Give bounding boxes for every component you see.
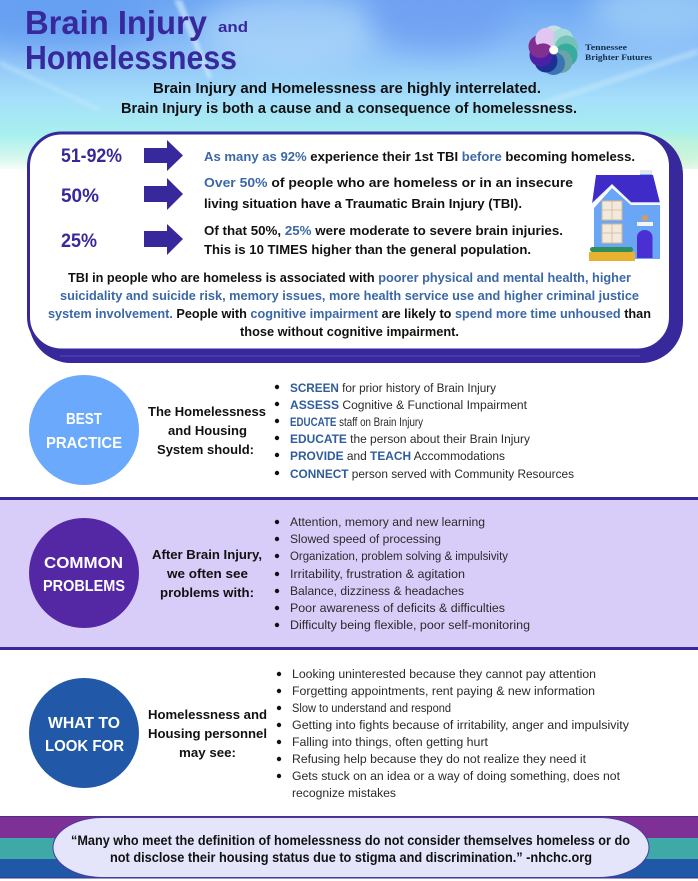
list: best practice actions <box>275 381 574 481</box>
list: best practice actions: CONNECT person served with Community Resources <box>290 467 574 481</box>
stat: 50%: Over 50% of people who are homeless or in an insecure <box>204 175 573 190</box>
stat: 25% <box>61 223 563 257</box>
list: best practice actions: ASSESS Cognitive & Functional Impairment <box>290 398 528 412</box>
panel: statistics card <box>28 133 683 363</box>
heading: after brain injury: problems with: <box>160 585 254 600</box>
text block: TBI paragraph: those without cognitive impairment. <box>240 324 459 339</box>
circle: best practice: PRACTICE <box>46 435 122 452</box>
card shadow highlight line <box>60 355 640 357</box>
list: what to look for: Refusing help because they do not realize they need it <box>292 752 587 766</box>
heading: homelessness and housing personnel: may see: <box>179 745 236 760</box>
stat: 51-92%: As many as 92% experience their 1st TBI before becoming homeless. <box>204 149 635 164</box>
heading: homelessness and housing personnel <box>148 707 267 760</box>
panel: common problems <box>0 497 698 650</box>
circle: best practice: BEST <box>66 411 102 428</box>
heading: the homelessness and housing system should: System should: <box>157 442 254 457</box>
callout: quote pill <box>53 818 649 878</box>
heading: homelessness and housing personnel: Homelessness and <box>148 707 267 722</box>
subtitle <box>121 81 577 117</box>
circle: common problems <box>29 518 139 628</box>
list: best practice actions: EDUCATE staff on Brain Injury <box>290 415 424 429</box>
list: common problems: Difficulty being flexible, poor self-monitoring <box>290 618 530 632</box>
heading: the homelessness and housing system should: and Housing <box>168 423 247 438</box>
text block: TBI paragraph: suicidality and suicide risk, memory issues, more health service use and higher criminal justice <box>60 288 639 303</box>
stat: 50%: living situation have a Traumatic Brain Injury (TBI). <box>204 196 522 211</box>
stat: 50% <box>61 175 573 211</box>
heading: homelessness and housing personnel: Housing personnel <box>148 726 267 741</box>
arrow <box>144 224 183 255</box>
list: what to look for: Falling into things, often getting hurt <box>292 735 489 749</box>
list: what to look for: Getting into fights because of irritability, anger and impulsivity <box>292 718 630 732</box>
logo: Tennessee Brighter Futures: Tennessee <box>585 42 627 52</box>
title: and <box>218 19 248 36</box>
list: what to look for: Looking uninterested because they cannot pay attention <box>292 667 596 681</box>
panel: best practice <box>29 375 574 485</box>
text block: TBI paragraph: system involvement. People with cognitive impairment are likely to spend more time unhoused than <box>48 306 651 321</box>
icon: house <box>589 170 660 261</box>
list: what to look for: recognize mistakes <box>292 786 396 800</box>
heading: after brain injury <box>152 547 262 600</box>
stat: 25%: 25% <box>61 231 97 252</box>
stat: 50%: 50% <box>61 186 99 207</box>
stat: 25%: This is 10 TIMES higher than the general population. <box>204 242 531 257</box>
list: what to look for: Forgetting appointments, rent paying & new information <box>292 684 595 698</box>
stat: 25%: Of that 50%, 25% were moderate to severe brain injuries. <box>204 223 563 238</box>
list: common problems: Slowed speed of processing <box>290 532 441 546</box>
circle: common problems: COMMON <box>44 555 123 572</box>
circle: best practice <box>29 375 139 485</box>
circle: what to look for: WHAT TO <box>48 715 120 732</box>
circle: what to look for: LOOK FOR <box>45 738 124 755</box>
list: best practice actions: SCREEN for prior history of Brain Injury <box>290 381 497 395</box>
arrow <box>144 178 183 210</box>
callout: quote pill: “Many who meet the definition of homelessness do not consider themselves homeless or do <box>71 833 630 848</box>
text block: TBI paragraph <box>48 270 651 339</box>
list: common problems: Poor awareness of deficits & difficulties <box>290 601 505 615</box>
panel: what to look for <box>29 667 630 800</box>
list: best practice actions: PROVIDE and TEACH Accommodations <box>290 449 505 463</box>
subtitle: Brain Injury is both a cause and a consequence of homelessness. <box>121 101 577 117</box>
heading: the homelessness and housing system should: The Homelessness <box>148 404 266 419</box>
list: common problems: Irritability, frustration & agitation <box>290 567 465 581</box>
list: best practice actions: EDUCATE the person about their Brain Injury <box>290 432 531 446</box>
title <box>25 4 248 76</box>
logo: Tennessee Brighter Futures: Brighter Futures <box>585 52 653 62</box>
stat: 51-92%: 51-92% <box>61 146 122 167</box>
list: common problems: Balance, dizziness & headaches <box>290 584 464 598</box>
list: common problems: Attention, memory and new learning <box>290 515 485 529</box>
circle: common problems: PROBLEMS <box>43 578 125 595</box>
text block: TBI paragraph: TBI in people who are homeless is associated with poorer physical and mental health, higher <box>68 270 631 285</box>
circle: what to look for <box>29 678 139 788</box>
footer: colored bands <box>0 816 698 878</box>
list: what to look for: Gets stuck on an idea or a way of doing something, does not <box>292 769 621 783</box>
title: Homelessness <box>25 39 237 76</box>
callout: quote pill: not disclose their housing status due to stigma and discrimination.” -nhchc.org <box>110 850 592 865</box>
arrow <box>144 140 183 171</box>
header sky background <box>0 0 698 169</box>
title: Brain Injury <box>25 4 208 41</box>
subtitle: Brain Injury and Homelessness are highly interrelated. <box>153 81 541 97</box>
list: common problems: Organization, problem solving & impulsivity <box>290 549 509 563</box>
logo: Tennessee Brighter Futures <box>528 26 653 75</box>
list: common problems <box>275 515 530 632</box>
list: what to look for: Slow to understand and respond <box>292 701 451 715</box>
card shadow <box>29 133 683 363</box>
card body <box>28 133 670 350</box>
list: what to look for <box>277 667 630 800</box>
heading: the homelessness and housing system should <box>148 404 266 457</box>
heading: after brain injury: After Brain Injury, <box>152 547 262 562</box>
heading: after brain injury: we often see <box>166 566 248 581</box>
stat: 51-92% <box>61 140 635 171</box>
